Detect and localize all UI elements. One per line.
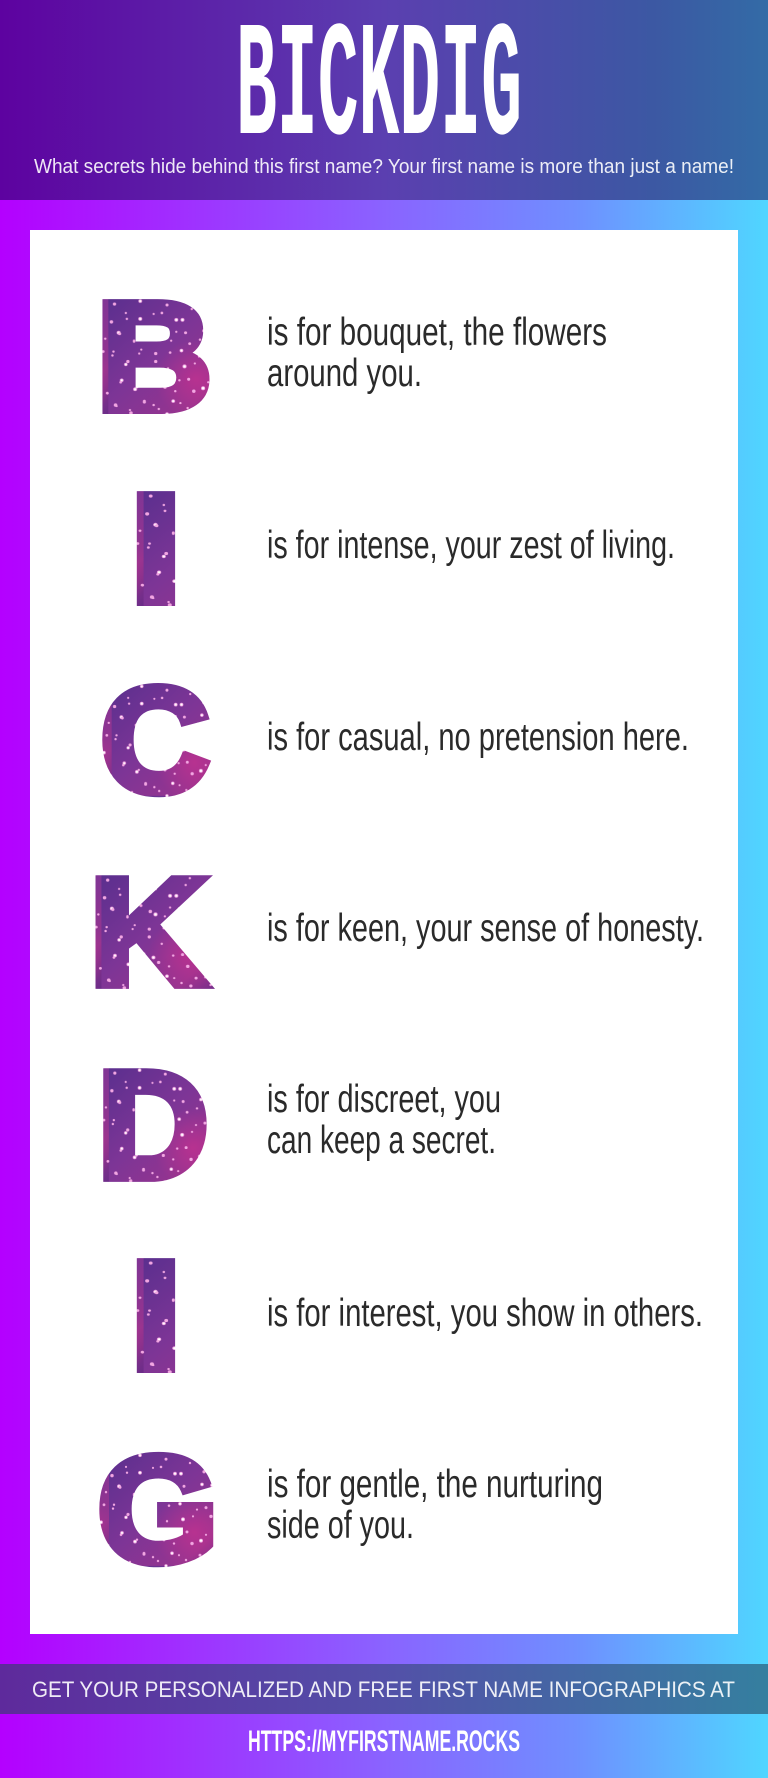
- footer call to action: GET YOUR PERSONALIZED AND FREE FIRST NAME INFOGRAPHICS AT: [32, 1677, 735, 1702]
- text: gentle: is for gentle, the nurturing: [267, 1463, 603, 1506]
- subtitle: What secrets hide behind this first name? Your first name is more than just a name!: [34, 156, 734, 178]
- text: discreet: [267, 1078, 501, 1162]
- header band: [0, 0, 768, 200]
- row: D: [98, 1042, 501, 1210]
- row: B: [97, 271, 607, 441]
- text: gentle: [267, 1463, 603, 1547]
- letter I: I: [130, 1230, 181, 1401]
- text: bouquet: [267, 311, 607, 395]
- letter B: B: [97, 271, 212, 441]
- row: I second: [130, 1230, 703, 1401]
- letter C: C: [101, 658, 209, 823]
- row: I: [130, 463, 675, 634]
- letter K: K: [90, 847, 206, 1016]
- text: discreet: can keep a secret.: [267, 1119, 496, 1162]
- footer band: [0, 1664, 768, 1714]
- row: C: [101, 658, 689, 823]
- letter D: D: [98, 1042, 208, 1210]
- row: G: [98, 1427, 603, 1593]
- text: discreet: is for discreet, you: [267, 1078, 501, 1121]
- footer url: HTTPS://MYFIRSTNAME.ROCKS: [248, 1725, 520, 1758]
- text: bouquet: around you.: [267, 352, 422, 395]
- letter G: G: [98, 1427, 218, 1593]
- panel: white letters panel: [30, 230, 738, 1634]
- text: bouquet: is for bouquet, the flowers: [267, 311, 607, 354]
- letter I: I: [130, 463, 181, 634]
- row: K: [90, 847, 704, 1016]
- text: gentle: side of you.: [267, 1504, 414, 1547]
